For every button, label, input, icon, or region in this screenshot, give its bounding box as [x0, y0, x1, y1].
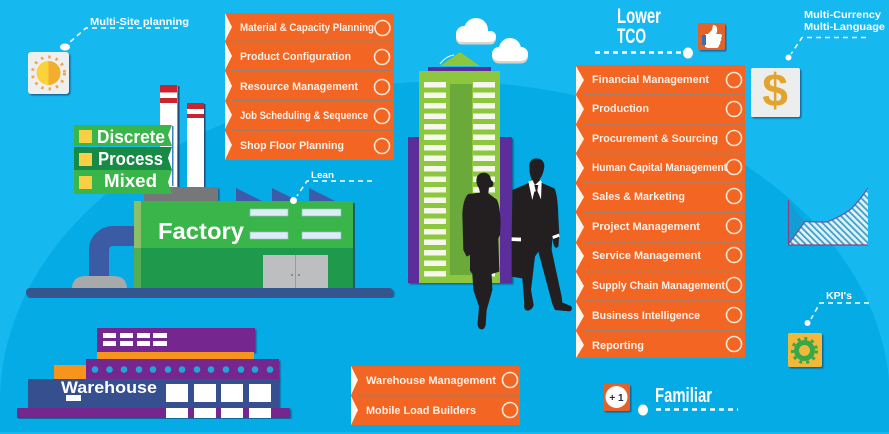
row: business intelligence: Business Intelligence [592, 310, 700, 322]
row: mobile load builders: Mobile Load Builders [366, 405, 476, 417]
pipe base [72, 276, 127, 289]
warehouse label: Warehouse [61, 378, 157, 397]
row: warehouse management: Warehouse Management [366, 375, 496, 387]
callout: lower TCO: Lower [617, 5, 661, 28]
building [134, 201, 353, 248]
callout: KPIs [804, 291, 869, 326]
factory [26, 85, 393, 297]
dots [92, 366, 273, 373]
panel: manufacturing types: Process [98, 149, 163, 169]
panel: enterprise functions [576, 65, 745, 358]
row: reporting [592, 336, 742, 352]
callout: multi-site planning: Multi-Site planning [90, 16, 189, 28]
row: job scheduling and sequence: Job Scheduling & Sequence [240, 110, 368, 122]
tower windows [424, 82, 495, 276]
panel: manufacturing types: Discrete [97, 127, 165, 147]
side wings [408, 137, 512, 283]
base [17, 408, 290, 418]
row: production [592, 102, 742, 116]
callout: multi-site planning [60, 16, 189, 50]
icon: plus one: + 1 [609, 393, 624, 404]
row: financial management: Financial Management [592, 74, 709, 86]
icon: dollar [751, 64, 800, 117]
row: shop floor planning [240, 138, 390, 154]
businessman silhouette [512, 158, 572, 311]
row: project management: Project Management [592, 221, 700, 233]
icon: plus one [603, 384, 630, 411]
large windows [66, 384, 271, 418]
tower [408, 52, 512, 283]
panel: warehouse functions [351, 366, 520, 425]
callout: lower TCO: TCO [617, 25, 646, 48]
callout: multi-currency and multi-language: Multi-Currency [804, 10, 881, 21]
icon: dollar: $ [762, 64, 788, 116]
roof [440, 52, 480, 66]
ground base [26, 288, 393, 297]
row: sales and marketing: Sales & Marketing [592, 191, 685, 203]
row: sales and marketing [592, 188, 742, 204]
row: shop floor planning: Shop Floor Planning [240, 140, 344, 152]
panel: manufacturing types [74, 125, 174, 194]
windows [250, 209, 341, 239]
clouds [456, 18, 528, 64]
callout: KPIs: KPI's [826, 291, 852, 302]
row: business intelligence [592, 308, 742, 322]
row: human capital management: Human Capital Management [592, 162, 727, 174]
row: resource management: Resource Management [240, 81, 358, 93]
row: product configuration: Product Configuration [240, 51, 351, 63]
row: warehouse management [366, 372, 518, 388]
row: mobile load builders [366, 402, 518, 418]
callout: lean [290, 170, 372, 204]
row: service management: Service Management [592, 250, 701, 262]
upper windows [103, 333, 167, 346]
panel: manufacturing types: Mixed [104, 171, 157, 191]
row: project management [592, 218, 742, 234]
warehouse [17, 328, 290, 418]
factory label: Factory [158, 218, 244, 244]
platform [144, 187, 218, 201]
chimneys [160, 85, 206, 190]
callout: multi-currency and multi-language: Multi-Language [804, 22, 885, 33]
icon: thumbs up [698, 23, 725, 50]
upper floor [97, 328, 255, 352]
icon: gear [788, 333, 822, 367]
area chart [788, 188, 868, 245]
callout: familiar: Familiar [655, 385, 712, 407]
roof vents [236, 188, 335, 201]
main block [419, 71, 500, 283]
callout: multi-currency and multi-language [786, 10, 885, 60]
panel: manufacturing functions [225, 13, 394, 160]
icon: sun [28, 52, 69, 94]
lower floor [28, 379, 279, 408]
row: material and capacity planning: Material & Capacity Planning [240, 22, 374, 34]
callout: lean: Lean [311, 170, 334, 181]
row: reporting: Reporting [592, 340, 644, 352]
middle floor [86, 359, 279, 380]
row: procurement and sourcing: Procurement & Sourcing [592, 133, 718, 145]
row: financial management [592, 72, 742, 88]
callout: familiar [638, 385, 738, 416]
row: supply chain management: Supply Chain Management [592, 280, 725, 292]
row: product configuration [240, 50, 390, 64]
row: production: Production [592, 103, 649, 115]
businesswoman silhouette [462, 173, 501, 329]
pipe [99, 236, 134, 280]
row: procurement and sourcing [592, 130, 742, 146]
row: resource management [240, 80, 390, 94]
row: service management [592, 248, 742, 262]
callout: lower TCO [595, 5, 693, 58]
door [263, 255, 328, 289]
